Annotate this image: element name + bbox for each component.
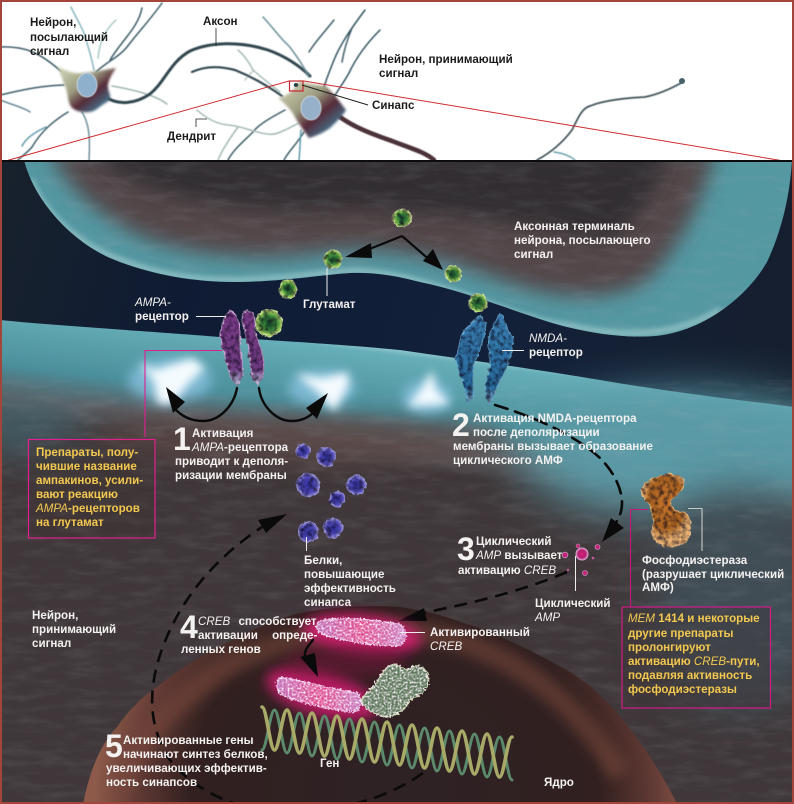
callout: MEM 1414: пролонгируют: [628, 641, 711, 654]
step 2: Активация NMDA-рецептора: [473, 412, 637, 425]
callout: ampakines: AMPA-рецепторов: [35, 502, 140, 515]
label: AMPA receptor: AMPA-: [134, 296, 171, 309]
callout: ampakines: ампакинов, усили-: [36, 474, 143, 487]
step 4: 4: [180, 609, 198, 645]
glutamate molecules: [279, 208, 488, 312]
label: axon terminal: нейрона, посылающего: [514, 234, 651, 247]
brown tint: [90, 414, 510, 466]
step 1: ризации мембраны: [175, 469, 287, 482]
left teal area: [0, 403, 90, 447]
step 3: активацию CREB: [458, 564, 556, 577]
step 1: AMPA-рецептора: [191, 441, 289, 454]
label: proteins: Белки,: [304, 554, 342, 567]
label: dendrite: Дендрит: [167, 130, 216, 143]
proteins: [296, 444, 366, 542]
step 4: активации опреде-: [198, 629, 318, 642]
callout: MEM 1414: фосфодиэстеразы: [628, 683, 737, 696]
step 3: AMP вызывает: [475, 549, 563, 562]
step 3: [457, 531, 563, 577]
arrows: glutamate release: [345, 236, 443, 270]
step 5: ность синапсов: [106, 776, 197, 789]
black divider: [2, 160, 792, 162]
label: NMDA receptor: рецептор: [529, 346, 583, 359]
callout: ampakines: на глутамат: [36, 516, 104, 529]
step 5: [105, 728, 268, 789]
step 4: [180, 609, 318, 656]
callout: MEM 1414: активацию CREB-пути,: [628, 655, 760, 668]
dashed arrow: 3 to 4: [398, 572, 567, 621]
NMDA receptor: [455, 313, 513, 405]
label: receiving neuron: Нейрон, принимающий: [379, 53, 513, 66]
remote axon: [537, 83, 681, 160]
callout: ampakines: Препараты, полу-: [36, 446, 138, 459]
presynaptic terminal: [24, 150, 794, 340]
callout: MEM 1414: подавляя активность: [628, 669, 752, 682]
postsynaptic membrane: [2, 320, 792, 504]
label: sending neuron: Нейрон,: [30, 16, 76, 29]
label: cyclic AMP: [534, 556, 611, 624]
label: activated CREB: CREB: [430, 640, 462, 653]
label: proteins: [304, 537, 396, 609]
label: activated CREB: Активированный: [430, 626, 530, 639]
label: NMDA receptor: NMDA-: [529, 332, 567, 345]
dashed arrow: 5 to proteins: [152, 514, 423, 804]
cyclic AMP molecules: [562, 544, 600, 576]
step 4: CREB способствует: [198, 615, 317, 628]
label: AMPA receptor: [134, 296, 226, 323]
panel: neurons overview: [0, 0, 794, 162]
CREB active: glow: [260, 608, 424, 731]
label: cyclic AMP: Циклический: [535, 597, 611, 610]
arrow: CREB to gene: [300, 640, 318, 677]
pink connector: ampakines: [145, 350, 222, 437]
label: axon terminal: Аксонная терминаль: [514, 220, 635, 233]
neuron body 2: [278, 81, 346, 138]
label: proteins: повышающие: [304, 568, 385, 581]
step 1: [173, 421, 289, 482]
arrows: depolarization: [166, 387, 328, 421]
step 5: 5: [105, 728, 123, 764]
neuron body 1: [58, 66, 116, 112]
step 5: Активированные гены: [123, 734, 254, 747]
label: receiving neuron: сигнал: [379, 67, 418, 80]
label: proteins: синапса: [304, 596, 352, 609]
CREB molecule upper: [316, 618, 406, 646]
step 2: 2: [452, 407, 470, 443]
dendrite upper left: [192, 67, 282, 96]
pink connector: MEM: [630, 510, 648, 607]
label: receiving neuron: сигнал: [32, 637, 71, 650]
nucleus: [83, 606, 677, 804]
label: axon terminal: сигнал: [514, 248, 553, 261]
right teal area: [520, 393, 794, 517]
CREB molecule lower: [276, 677, 361, 712]
label: sending neuron: посылающий: [30, 31, 108, 44]
label: sending neuron: сигнал: [30, 45, 69, 58]
step 5: увеличивающих эффектив-: [106, 762, 267, 775]
label: activated CREB: [400, 626, 530, 653]
label: NMDA receptor: [502, 332, 583, 359]
phosphodiesterase molecule: [641, 474, 691, 547]
step 1: приводит к деполя-: [175, 455, 288, 468]
label: AMPA receptor: рецептор: [135, 310, 189, 323]
label: phosphodiesterase: Фосфодиэстераза: [642, 554, 747, 567]
texture: [0, 380, 794, 804]
label: phosphodiesterase: (разрушает циклический: [642, 568, 784, 581]
label: receiving neuron: принимающий: [32, 623, 116, 636]
white connector: phosphodiesterase: [688, 508, 702, 551]
AMPA receptor: [220, 309, 283, 385]
label: proteins: эффективность: [304, 582, 396, 595]
label: gene: Ген: [320, 757, 339, 770]
neuron: receiving signal: [192, 10, 681, 160]
step 2: циклического АМФ: [453, 454, 563, 467]
axon: [104, 44, 310, 103]
step 2: после деполяризации: [473, 426, 600, 439]
glow spots: [128, 358, 451, 413]
callout: MEM 1414: другие препараты: [628, 627, 734, 640]
axon end terminal: [679, 78, 685, 84]
step 5: начинают синтез белков,: [123, 748, 268, 761]
step 4: ленных генов: [181, 643, 261, 656]
gene: DNA helix: [262, 707, 512, 780]
step 3: Циклический: [476, 535, 552, 548]
dashed arrow: 2 to 3: [495, 405, 624, 542]
label: synapse: Синапс: [372, 99, 415, 112]
callout: ampakines: чившие название: [36, 460, 137, 473]
label: cyclic AMP: AMP: [534, 611, 560, 624]
step 1: 1: [173, 421, 191, 457]
neuron: sending signal: [0, 3, 310, 160]
label: axon: [203, 15, 238, 46]
lower dark cytoplasm: [0, 440, 794, 804]
label: glutamate: Глутамат: [303, 298, 356, 311]
label: receiving neuron: Нейрон,: [32, 609, 78, 622]
label: phosphodiesterase: АМФ): [642, 581, 674, 594]
callout: ampakines: вают реакцию: [36, 488, 118, 501]
label: nucleus: Ядро: [544, 776, 574, 789]
label: dendrite: [167, 119, 216, 143]
synapse marker: [2, 81, 790, 162]
step 3: 3: [457, 531, 475, 567]
step 2: [452, 407, 653, 467]
step 1: Активация: [192, 427, 253, 440]
label: axon: Аксон: [203, 15, 238, 28]
label: glutamate: [303, 268, 356, 311]
callout: MEM 1414: [622, 607, 770, 708]
axon 2: [340, 117, 434, 160]
step 2: мембраны вызывает образование: [453, 440, 653, 453]
callout: ampakines: [28, 440, 155, 538]
callout: MEM 1414: MEM 1414 и некоторые: [628, 612, 760, 625]
gene activator protein: [361, 664, 428, 717]
